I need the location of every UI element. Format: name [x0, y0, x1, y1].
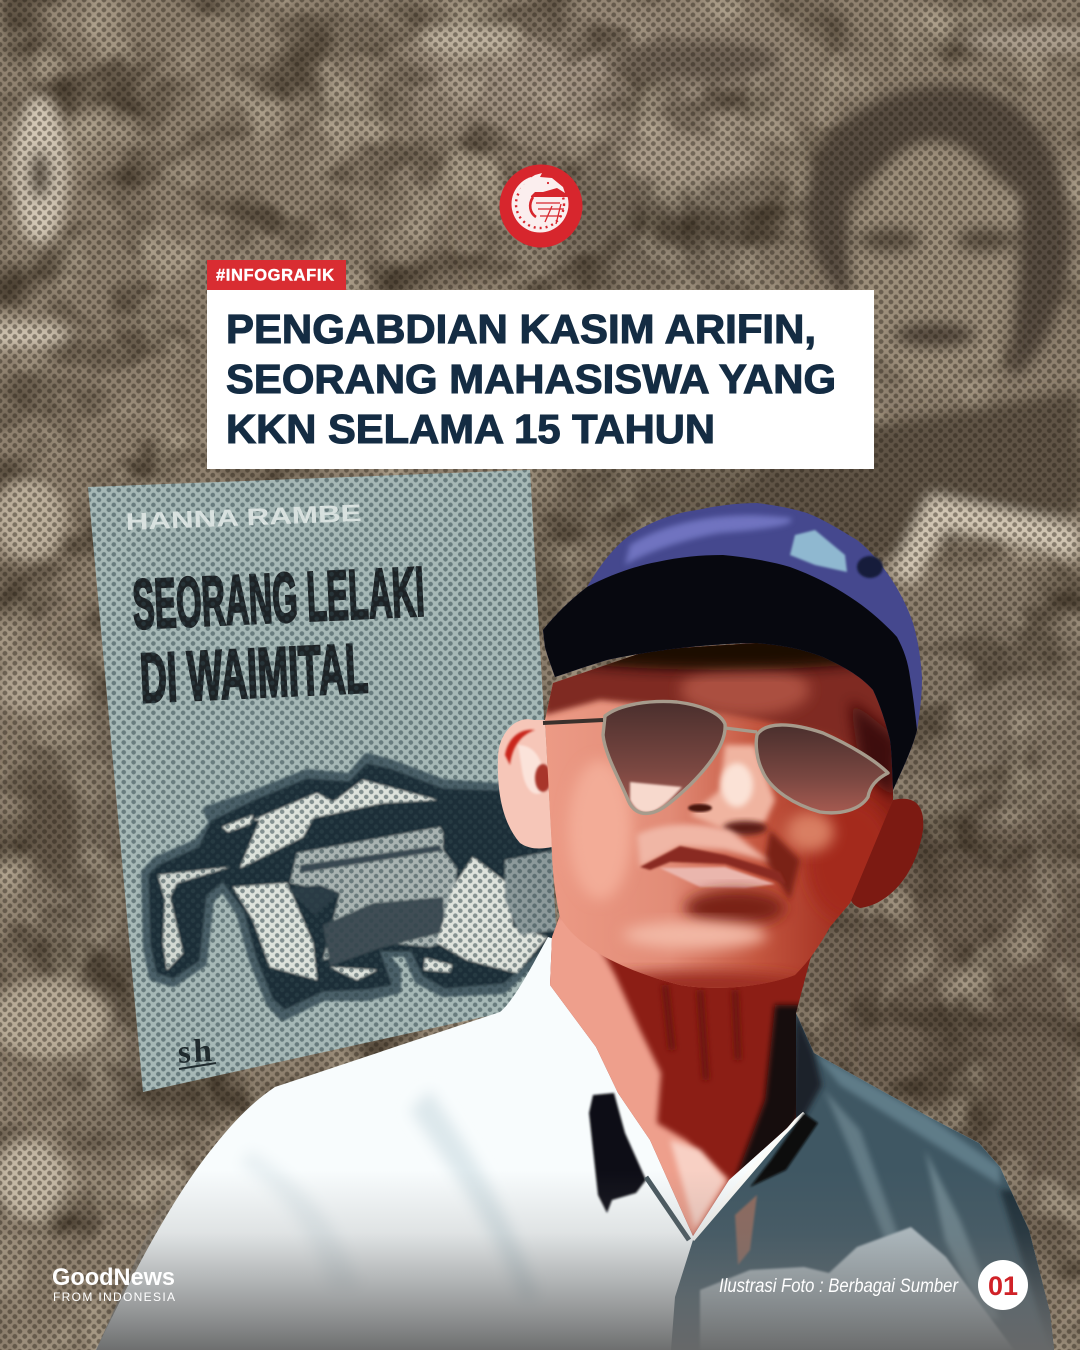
page number badge: [978, 1260, 1028, 1310]
man in cap and glasses: [96, 503, 1080, 1350]
title panel: [207, 290, 874, 469]
right ear: [850, 799, 923, 908]
left texture: [12, 95, 68, 245]
page number badge: 01: [988, 1271, 1018, 1301]
collars: [589, 1093, 818, 1240]
dark right side of shirt: [671, 1005, 1080, 1350]
book author: HANNA RAMBE: [125, 500, 362, 536]
logo: GNFI garuda badge: [500, 164, 582, 248]
nose: [690, 745, 775, 835]
title panel: SEORANG MAHASISWA YANG: [226, 356, 836, 402]
cap: [543, 503, 922, 790]
shadow beside neck: [790, 1010, 822, 1125]
collar tag detail: [735, 1195, 757, 1265]
title panel: KKN SELAMA 15 TAHUN: [226, 406, 715, 452]
left ear: [498, 719, 552, 848]
philtrum: [637, 825, 770, 867]
footer brand: GoodNews from Indonesia: [52, 1264, 175, 1304]
book cover: Seorang Lelaki di Waimital: SEORANG LELAKI: [131, 552, 426, 644]
tag: #INFOGRAFIK: [207, 260, 346, 290]
neck: [550, 916, 812, 1236]
book title: DI WAIMITAL: [138, 629, 370, 717]
tag: #INFOGRAFIK: #INFOGRAFIK: [216, 266, 334, 284]
glasses: [543, 702, 888, 813]
book cover: Seorang Lelaki di Waimital: [80, 465, 570, 1105]
shirt: [96, 910, 1080, 1350]
title panel: PENGABDIAN KASIM ARIFIN,: [226, 306, 816, 352]
footer brand: GoodNews from Indonesia: FROM INDONESIA: [53, 1290, 175, 1304]
book publisher mark: sh: [177, 1033, 213, 1071]
footer brand: GoodNews from Indonesia: GoodNews: [52, 1264, 175, 1291]
soldier hat and face (right): [805, 85, 1070, 380]
book title: [133, 566, 424, 704]
photo credit: Ilustrasi Foto : Berbagai Sumber: [719, 1276, 959, 1297]
forehead: [546, 643, 886, 748]
lips: [640, 846, 786, 884]
face: [545, 643, 893, 988]
book illustration: island landscape: [145, 757, 557, 1017]
chin: [685, 890, 785, 926]
bottom fade: [96, 1170, 1054, 1350]
